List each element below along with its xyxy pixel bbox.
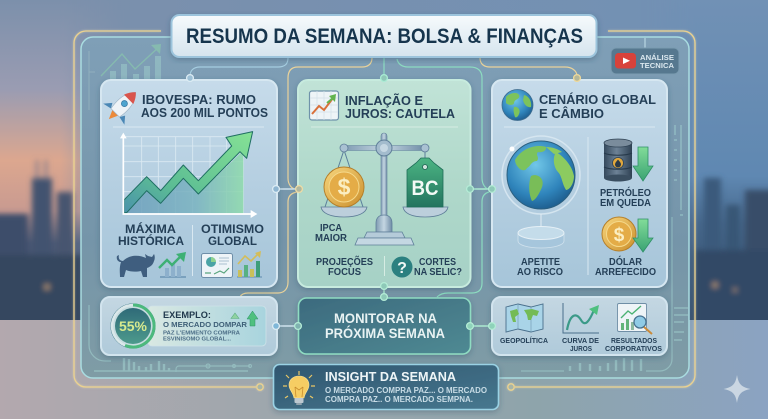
- label: dólar arrefecido: DÓLAR: [609, 255, 643, 268]
- icon: rocket: [98, 82, 146, 130]
- heading: cenário global: E CÂMBIO: [539, 106, 604, 121]
- label: petróleo em queda: EM QUEDA: [600, 198, 651, 209]
- icon: large globe on stand: [502, 136, 580, 248]
- icon: small rising chart: [159, 252, 186, 277]
- icon: dashboard card: [202, 254, 232, 278]
- inner example card: [148, 306, 266, 346]
- icon: triangle up: [231, 313, 239, 318]
- text: insight: O MERCADO COMPRA PAZ... O MERCADO: [325, 386, 487, 395]
- badge: análise técnica: [611, 48, 679, 74]
- heading: inflação e juros: INFLAÇÃO E: [345, 93, 423, 108]
- label: resultados corporativos: RESULTADOS: [611, 336, 657, 345]
- panel: monitorar na próxima semana: MONITORAR NA: [334, 311, 437, 326]
- label: cortes na selic: [414, 257, 462, 278]
- panel: Cenário global: [492, 80, 667, 287]
- label: máxima histórica: MÁXIMA: [125, 221, 176, 236]
- icon: light bulb: [283, 371, 315, 405]
- text: exemplo: [163, 310, 247, 342]
- icon: dollar coin: [602, 217, 636, 251]
- text: insight: [325, 369, 487, 404]
- label: IPCA maior: [315, 223, 348, 244]
- icon: bar chart with trend: [237, 251, 262, 277]
- icon: yield curve: [563, 303, 599, 333]
- badge: análise técnica: TECNICA: [640, 61, 675, 70]
- label: resultados corporativos: CORPORATIVOS: [605, 344, 662, 353]
- label: projeções focus: [316, 255, 373, 278]
- decorative faded chart, top left: [89, 44, 161, 110]
- heading: Ibovespa: IBOVESPA: RUMO: [142, 92, 256, 107]
- heading: Ibovespa: [141, 92, 268, 120]
- icon: sparkle star: [724, 375, 750, 403]
- panel: monitorar na próxima semana: PRÓXIMA SEMANA: [325, 326, 445, 341]
- label: geopolítica: GEOPOLÍTICA: [500, 336, 549, 345]
- icon: bull: [117, 254, 155, 277]
- outer teal frame: [81, 37, 689, 378]
- text: exemplo: EXEMPLO:: [163, 310, 211, 320]
- label: dólar arrefecido: ARREFECIDO: [595, 267, 656, 278]
- panel: exemplo 55%: [101, 297, 277, 355]
- label: projeções focus: FOCUS: [328, 267, 361, 278]
- line chart with rising arrow: [120, 132, 257, 218]
- panel: Ibovespa: [98, 80, 277, 287]
- label: otimismo global: [201, 222, 264, 248]
- label: otimismo global: GLOBAL: [208, 234, 257, 248]
- label: curva de juros: [562, 336, 599, 353]
- icon: small globe: [502, 90, 533, 120]
- icon: BC tag: BC: [412, 177, 438, 200]
- label: petróleo em queda: PETRÓLEO: [600, 186, 651, 199]
- label: cortes na selic: NA SELIC?: [414, 267, 462, 278]
- outer yellow frame line: [74, 31, 695, 390]
- label: apetite ao risco: APETITE: [521, 257, 560, 268]
- icon: corporate results: [618, 304, 652, 334]
- heading: cenário global: [539, 92, 656, 121]
- label: curva de juros: JUROS: [570, 344, 592, 353]
- badge: análise técnica: ANÁLISE: [640, 53, 674, 62]
- label: apetite ao risco: AO RISCO: [517, 267, 563, 278]
- label: otimismo global: OTIMISMO: [201, 222, 264, 236]
- label: cortes na selic: CORTES: [419, 257, 456, 268]
- icon: inflation chart: [310, 91, 338, 120]
- panel: temas a monitorar: [492, 297, 667, 355]
- label: curva de juros: CURVA DE: [562, 336, 599, 345]
- balance scale: [321, 133, 448, 245]
- title banner: [172, 15, 596, 57]
- label: petróleo em queda: [600, 186, 651, 209]
- text: insight: COMPRA PAZ.. O MERCADO SEMPNA.: [325, 395, 473, 404]
- text: exemplo: PAZ L'EMMENTO COMPRA: [163, 330, 240, 336]
- heading: cenário global: CENÁRIO GLOBAL: [539, 92, 656, 107]
- icon: arrow up: [247, 311, 258, 326]
- panel: Inflação e juros: [298, 80, 470, 287]
- text: insight: INSIGHT DA SEMANA: [325, 369, 457, 384]
- icon: dollar coin: $: [614, 225, 625, 246]
- label: IPCA maior: MAIOR: [315, 233, 348, 244]
- text: exemplo: ESVINISOMO GLOBAL...: [163, 336, 231, 342]
- label: resultados corporativos: [605, 336, 662, 353]
- label: dólar arrefecido: [595, 255, 656, 278]
- label: apetite ao risco: [517, 257, 563, 278]
- text: exemplo: O MERCADO DOMPAR: [163, 322, 247, 329]
- label: máxima histórica: [118, 221, 184, 248]
- icon: map: [506, 304, 543, 332]
- title banner: RESUMO DA SEMANA: BOLSA & FINANÇAS: [186, 25, 583, 48]
- panel: monitorar na próxima semana: [298, 298, 470, 354]
- icon: arrow down oil: [633, 147, 653, 181]
- heading: Ibovespa: AOS 200 MIL PONTOS: [141, 105, 268, 120]
- connector nodes: [187, 75, 580, 329]
- label: IPCA maior: IPCA: [320, 223, 342, 234]
- panel: insight da semana: [274, 364, 498, 410]
- icon: arrow down dollar: [633, 219, 653, 252]
- icon: gold dollar coin: $: [338, 174, 351, 200]
- icon: question mark: ?: [397, 260, 407, 277]
- heading: inflação e juros: JUROS: CAUTELA: [345, 106, 456, 121]
- gauge 55%: [111, 304, 155, 348]
- label: máxima histórica: HISTÓRICA: [118, 233, 184, 248]
- label: projeções focus: PROJEÇÕES: [316, 255, 373, 268]
- heading: inflação e juros: [345, 93, 456, 121]
- connector lines: [190, 38, 645, 326]
- icon: question mark: [392, 256, 412, 278]
- decorative side and bottom lines: [89, 125, 688, 378]
- gauge 55%: 55%: [119, 318, 148, 334]
- icon: oil barrel: [604, 139, 632, 182]
